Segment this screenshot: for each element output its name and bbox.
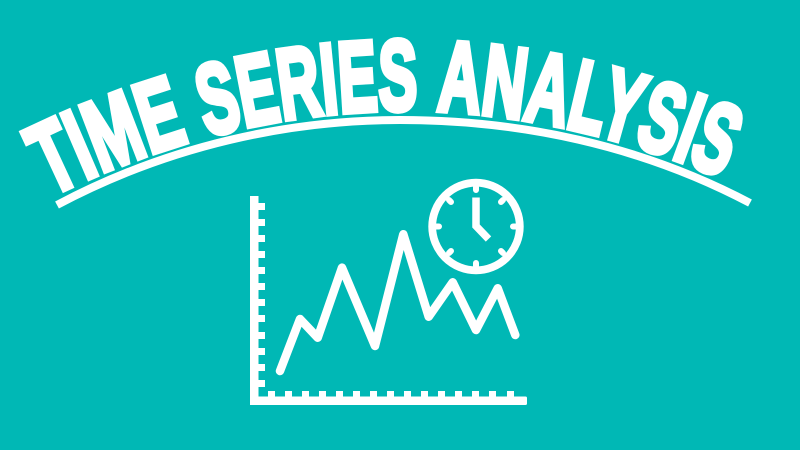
y axis ticks: [258, 203, 265, 387]
x axis: [250, 396, 527, 405]
icon: clock: [432, 183, 520, 270]
x axis ticks: [268, 391, 514, 397]
curved underline: [57, 120, 750, 205]
clock hour marks: [436, 187, 516, 266]
line chart: [280, 234, 515, 371]
title: TIMESERIESANALYSIS: [18, 37, 743, 194]
clock hands: [476, 198, 488, 239]
icon: chart axes: [250, 196, 527, 405]
y axis: [250, 196, 258, 405]
clock face: [432, 183, 520, 270]
